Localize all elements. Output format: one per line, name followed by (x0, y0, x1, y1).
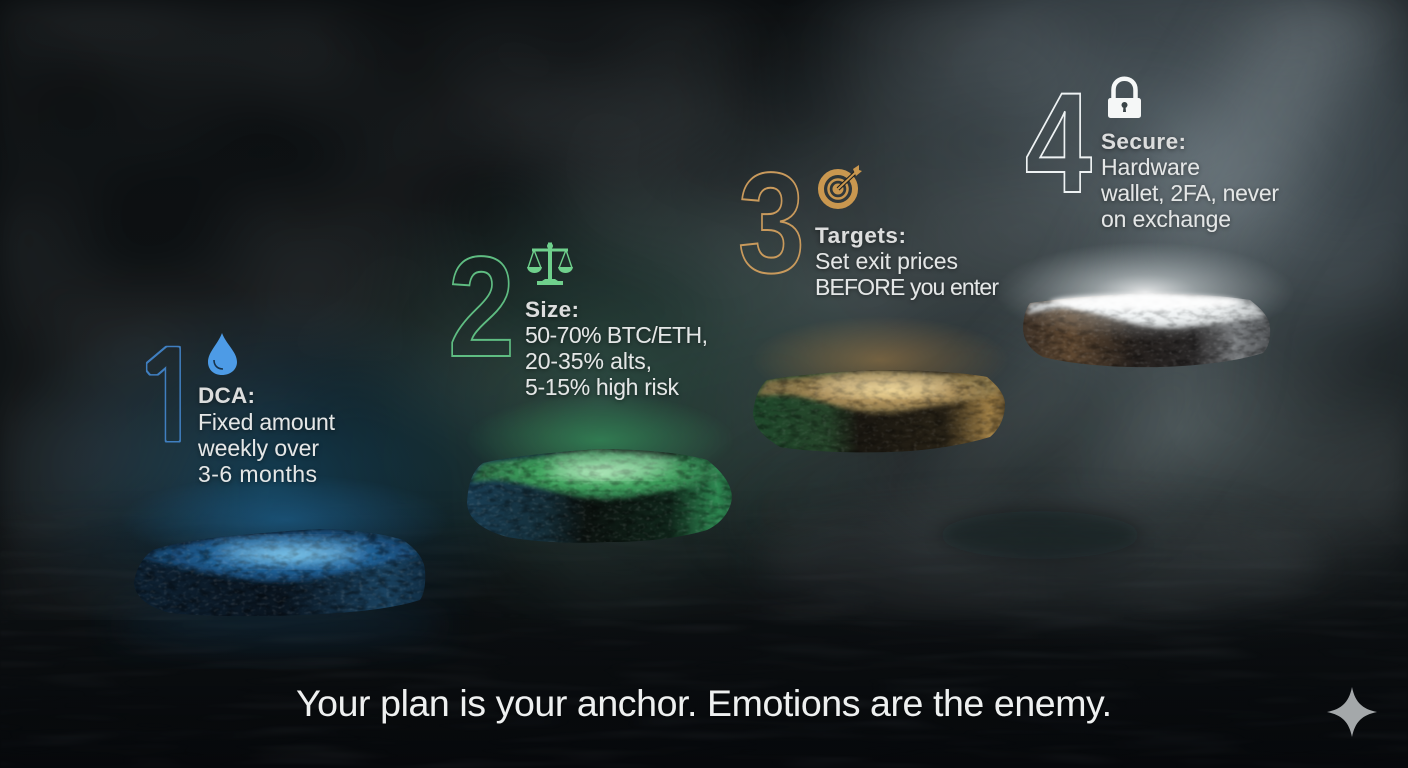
numeral 4: 4 (1025, 62, 1092, 222)
text: Targets description (815, 223, 999, 300)
text: DCA description: 3-6 months (198, 461, 317, 487)
icon: balance scale (527, 243, 573, 285)
text: Size description: 5-15% high risk (525, 374, 680, 400)
step 2: Size (448, 226, 708, 400)
icon: padlock (1108, 79, 1141, 118)
icon: target with arrow (821, 165, 862, 206)
numeral 1: 1 (133, 337, 205, 456)
caption: Your plan is your anchor. Emotions are the enemy. (296, 682, 1112, 724)
stone 2: green (460, 394, 740, 545)
icon: sparkle (1327, 687, 1377, 737)
text: Targets description: BEFORE you enter (815, 274, 999, 300)
text: Secure description: on exchange (1101, 206, 1231, 232)
text: Secure description: Secure: (1101, 129, 1186, 154)
text: Targets description: Set exit prices (815, 248, 958, 274)
text: DCA description: weekly over (197, 435, 319, 461)
text: Secure description (1100, 129, 1279, 232)
text: DCA description (197, 383, 336, 487)
step 4: Secure (1025, 62, 1279, 232)
text: Size description (525, 297, 708, 400)
step 3: Targets (738, 142, 999, 302)
numeral 2: 2 (448, 226, 515, 386)
light rays from upper right (720, 0, 1408, 530)
icon: water drop (208, 333, 237, 375)
text: Size description: 20-35% alts, (525, 348, 652, 374)
text: Targets description: Targets: (815, 223, 906, 248)
text: Secure description: wallet, 2FA, never (1100, 180, 1279, 206)
stone 3: gold (753, 322, 1005, 452)
text: Size description: 50-70% BTC/ETH, (525, 322, 708, 348)
numeral 3: 3 (738, 142, 805, 302)
text: Size description: Size: (525, 297, 579, 322)
text: DCA description: DCA: (198, 383, 255, 408)
text: Secure description: Hardware (1101, 154, 1200, 180)
stone 4: white (995, 242, 1295, 370)
step 1: DCA (133, 333, 336, 487)
water surface with reflections (160, 524, 1285, 651)
stone 1: blue (134, 482, 430, 616)
text: DCA description: Fixed amount (198, 409, 336, 435)
